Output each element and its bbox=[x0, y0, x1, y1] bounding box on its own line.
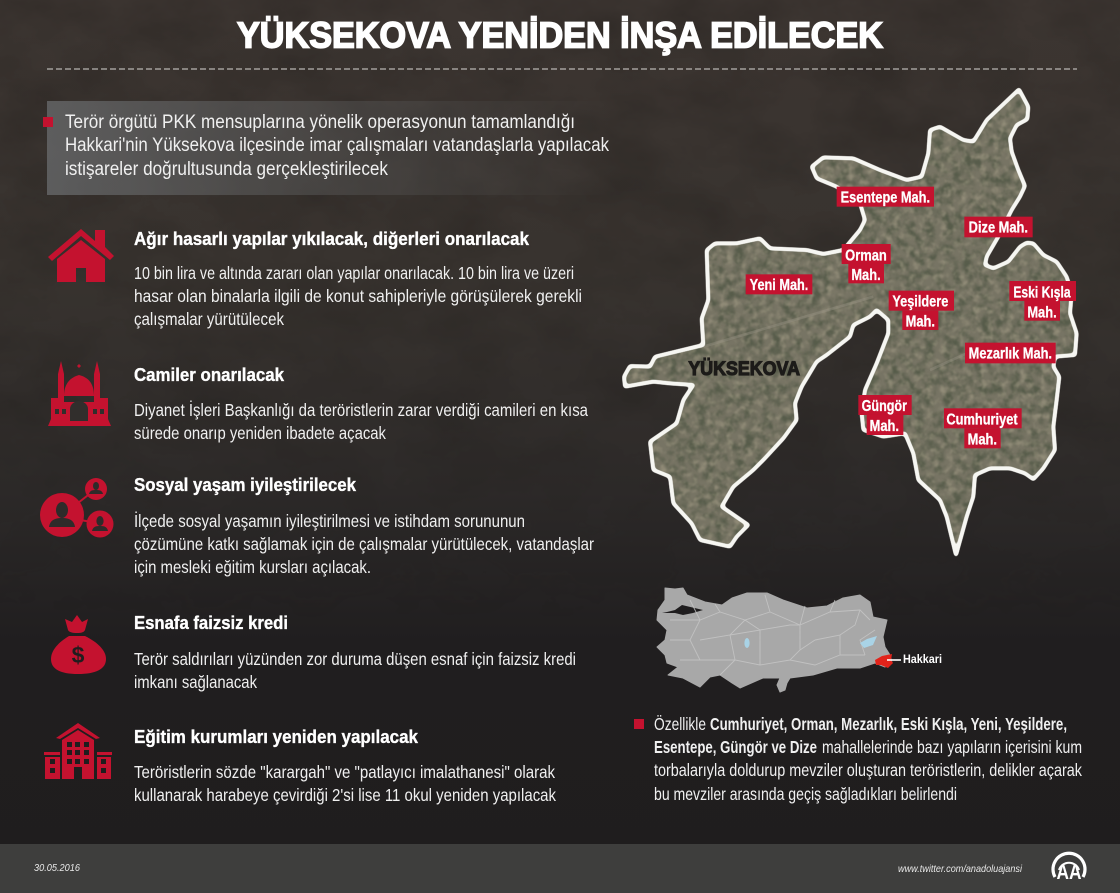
heading: section 1: Ağır hasarlı yapılar yıkılacak, diğerleri onarılacak bbox=[134, 229, 530, 249]
heading: section 3: Sosyal yaşam iyileştirilecek bbox=[134, 475, 357, 495]
map: Yüksekova neighbourhoods bbox=[620, 80, 1087, 560]
label: Yüksekova: YÜKSEKOVA bbox=[688, 357, 800, 380]
text: section 5: kullanarak harabeye çevirdiği 2'si lise 11 okul yeniden yapılacak bbox=[134, 785, 556, 805]
icon: intro bullet bbox=[43, 117, 53, 127]
label: Orman Mah.: Mah. bbox=[851, 267, 881, 284]
intro text: istişareler doğrultusunda gerçekleştirilecek bbox=[65, 159, 388, 180]
label: Güngör Mah.: Güngör bbox=[862, 398, 907, 415]
text: section 1: çalışmalar yürütülecek bbox=[134, 309, 284, 329]
province: Hakkari bbox=[875, 654, 893, 668]
map: Turkey locator bbox=[657, 588, 901, 692]
text: section 1 bbox=[134, 263, 582, 329]
text: section 3 bbox=[134, 511, 594, 577]
label: Eski Kışla Mah.: Mah. bbox=[1027, 304, 1057, 321]
icon: house bbox=[48, 229, 114, 282]
icon: AA logo: AA bbox=[1056, 861, 1082, 884]
label: Güngör Mah. bbox=[858, 395, 912, 435]
heading: section 5: Eğitim kurumları yeniden yapılacak bbox=[134, 727, 419, 747]
background bbox=[0, 0, 1120, 548]
heading: section 4: Esnafa faizsiz kredi bbox=[134, 613, 288, 633]
text: section 1: 10 bin lira ve altında zararı olan yapılar onarılacak. 10 bin lira ve üzeri bbox=[134, 263, 574, 283]
text: section 4: Terör saldırıları yüzünden zor duruma düşen esnaf için faizsiz kredi bbox=[134, 649, 576, 669]
text: section 2: sürede onarıp yeniden ibadete açacak bbox=[134, 423, 386, 443]
text: section 3: İlçede sosyal yaşamın iyileştirilmesi ve istihdam sorununun bbox=[134, 511, 525, 531]
label: Yeşildere Mah.: Yeşildere bbox=[892, 294, 949, 311]
intro text bbox=[65, 112, 609, 180]
label: Cumhuriyet Mah.: Mah. bbox=[968, 431, 997, 448]
text: section 3: için mesleki eğitim kursları açılacak. bbox=[134, 557, 371, 577]
intro text: Hakkari'nin Yüksekova ilçesinde imar çalışmaları vatandaşlarla yapılacak bbox=[65, 135, 609, 156]
label: Orman Mah.: Orman bbox=[845, 247, 887, 264]
icon: note bullet bbox=[634, 719, 644, 729]
text: section 1: hasar olan binalarla ilgili de konut sahipleriyle görüşülerek gerekli bbox=[134, 286, 582, 306]
text: note: Esentepe, Güngör ve Dize bbox=[654, 737, 817, 757]
label: Yeşildere Mah.: Mah. bbox=[906, 314, 935, 331]
icon: money bag: $ bbox=[72, 642, 85, 668]
panel: intro bbox=[43, 101, 612, 195]
text: section 5: Teröristlerin sözde "karargah" ve "patlayıcı imalathanesi" olarak bbox=[134, 762, 555, 782]
label: Eski Kışla Mah.: Eski Kışla bbox=[1013, 285, 1071, 302]
label: Yeşildere Mah. bbox=[889, 291, 954, 331]
heading: section 2: Camiler onarılacak bbox=[134, 365, 285, 385]
text: section 4: imkanı sağlanacak bbox=[134, 672, 257, 692]
label: Mezarlık Mah.: Mezarlık Mah. bbox=[969, 346, 1052, 363]
label: Orman Mah. bbox=[842, 244, 891, 284]
label: Yeni Mah.: Yeni Mah. bbox=[750, 277, 808, 294]
text: section 5 bbox=[134, 762, 556, 805]
icon: social people bbox=[40, 478, 114, 538]
text: section 4 bbox=[134, 649, 576, 692]
title: YÜKSEKOVA YENİDEN İNŞA EDİLECEK bbox=[237, 15, 883, 56]
label: Hakkari: Hakkari bbox=[903, 652, 942, 666]
text: note: bu mevziler arasında geçiş sağladıkları belirlendi bbox=[654, 784, 957, 804]
label: Güngör Mah.: Mah. bbox=[870, 418, 899, 435]
text: section 3: çözümüne katkı sağlamak için de çalışmalar yürütülecek, vatandaşlar bbox=[134, 534, 594, 554]
label: Cumhuriyet Mah. bbox=[944, 408, 1022, 448]
intro text: Terör örgütü PKK mensuplarına yönelik operasyonun tamamlandığı bbox=[65, 112, 575, 133]
footer bbox=[0, 844, 1120, 893]
text: section 2 bbox=[134, 400, 588, 443]
lake: Tuz bbox=[744, 638, 750, 648]
label: Dize Mah.: Dize Mah. bbox=[969, 220, 1028, 237]
text: note bbox=[654, 714, 1082, 804]
label: Mezarlık Mah. bbox=[965, 343, 1056, 363]
icon: AA logo bbox=[1053, 853, 1085, 884]
label: Eski Kışla Mah. bbox=[1009, 281, 1076, 321]
text: note: Özellikle bbox=[654, 714, 706, 734]
lake: Van bbox=[860, 636, 877, 648]
footer date: 30.05.2016 bbox=[34, 863, 80, 874]
icon: money bag bbox=[51, 615, 106, 674]
icon: mosque bbox=[48, 361, 111, 426]
icon: school building bbox=[44, 723, 112, 779]
text: section 2: Diyanet İşleri Başkanlığı da teröristlerin zarar verdiği camileri en kısa bbox=[134, 400, 588, 420]
footer link: www.twitter.com/anadoluajansi bbox=[898, 863, 1023, 875]
label: Cumhuriyet Mah.: Cumhuriyet bbox=[946, 411, 1018, 428]
label: Esentepe Mah.: Esentepe Mah. bbox=[841, 189, 930, 206]
